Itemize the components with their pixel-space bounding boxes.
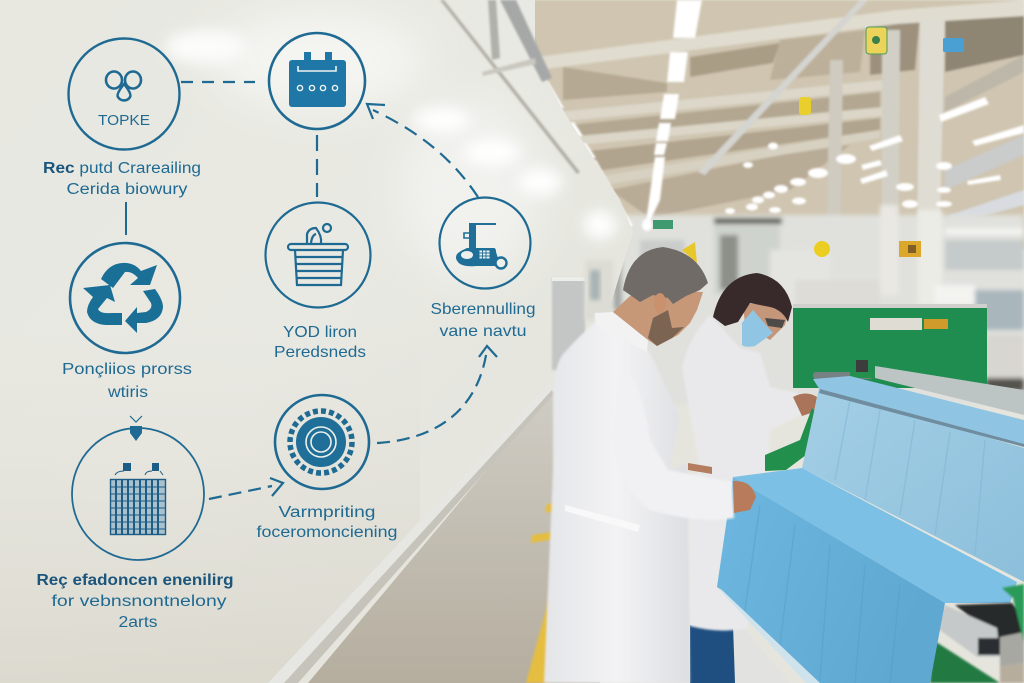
caption: Reç efadoncen enenilirg: Reç efadoncen enenilirg [36,572,234,589]
caption: foceromonciening: foceromonciening [256,524,398,541]
caption: Cerida biowury: Cerida biowury [66,181,188,198]
wall [0,0,633,683]
lab coat [544,313,690,683]
ceiling lights [535,0,1024,231]
hand [793,394,817,416]
lab coat [682,315,802,631]
caption: YOD liron: YOD liron [283,324,357,341]
arrow: machine to calendar [367,104,478,197]
circle [269,33,365,129]
ear [654,293,666,313]
connector: circle 1 to circle 2 [181,81,255,83]
face [743,303,790,340]
flat table [733,468,1017,603]
connector: text to recycling [125,202,127,235]
hair [623,247,708,304]
hanging cloth [717,477,945,683]
caption: Sberennulling: Sberennulling [430,301,536,318]
green machine [793,304,1024,415]
circle caption: TOPKE [98,112,150,129]
caption: Ponçliios prorss: Ponçliios prorss [62,361,192,378]
icon: three loops [106,72,141,100]
photo: factory background [308,0,1024,683]
caption: 2arts: 2arts [118,614,158,631]
caption: Varmpriting: Varmpriting [278,504,376,521]
door panel [552,278,585,370]
goggles [765,318,785,328]
hair [713,273,792,326]
woman [682,273,817,683]
step: recycling [70,243,180,353]
lower edge [717,587,820,683]
icon: small down arrow [130,416,142,441]
control panel [870,318,948,330]
ceiling edge [500,0,552,82]
circle [68,38,180,150]
neck and face [613,290,703,346]
icon: recycling arrows [83,263,163,333]
belt [565,505,640,532]
caption: wtiris: wtiris [107,384,148,401]
icon: grid panel [110,463,166,535]
circle [70,243,180,353]
step: TOPKE [68,38,180,150]
step: basket [266,202,370,308]
icon: calendar [289,52,346,107]
step: calendar [269,33,365,129]
green brackets [765,408,818,471]
skirting [268,382,553,683]
upper panel [802,388,1024,582]
top rail [813,376,1024,447]
caption: Rec putd Crareailing: Rec putd Crareailing [43,160,201,177]
roller assembly [930,584,1024,683]
beard [648,310,684,346]
arrow: gear to machine [377,346,497,443]
step: gear [275,395,369,489]
mask [742,310,773,347]
ceiling [500,0,1024,300]
signs [653,27,964,263]
man [544,247,756,683]
floor [308,392,600,683]
blue fabric on machine [717,376,1024,683]
jeans [690,625,735,683]
circle [275,395,369,489]
arrow: filter to gear [209,478,283,499]
back of the hall [600,205,1024,405]
caption: Peredsneds: Peredsneds [274,344,366,361]
step: grid filter [72,416,204,560]
sleeve [612,372,734,520]
caption: for vebnsnontnelony: for vebnsnontnelony [52,593,227,610]
light floor [700,600,790,683]
circle [72,428,204,560]
caption: vane navtu: vane navtu [440,323,526,340]
icon: gear disc [290,411,352,473]
floor markings [526,502,566,683]
circle [266,202,370,308]
hand [733,481,756,513]
collar [595,312,648,352]
icon: basket [288,224,348,285]
icon: machine [456,223,506,268]
connector: circle 3 to circle 2 [316,135,318,197]
circle [440,198,530,288]
step: machine [440,198,530,288]
